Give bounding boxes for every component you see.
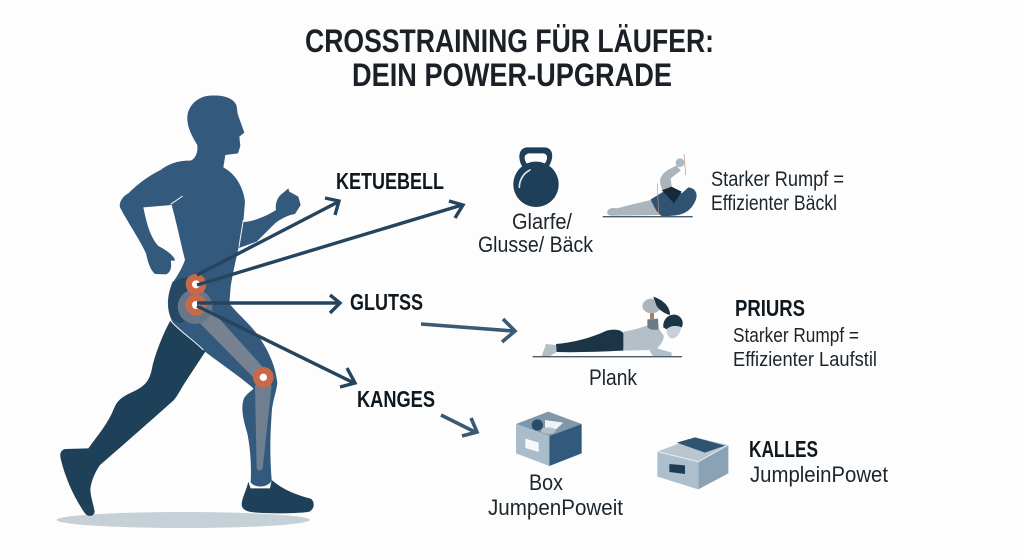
title: DEIN POWER-UPGRADE: [352, 57, 672, 93]
highlight lines on body: [170, 196, 243, 350]
body and front leg: [120, 95, 301, 487]
arrow: hip to Glutss: [197, 295, 340, 313]
block: Priurs: PRIURS: [735, 295, 805, 321]
runner figure: [57, 95, 314, 528]
icon: sit-up figure: [603, 154, 697, 217]
title: CROSSTRAINING FÜR LÄUFER:: [305, 23, 714, 59]
arrow: hip to Ketuebell: [197, 198, 339, 275]
text: Starker Rumpf, Effizienter Bäckl: Starker Rumpf =: [711, 168, 844, 191]
joint: knee: [253, 367, 274, 388]
text: Plank: Plank: [589, 365, 638, 390]
text: Box JumpenPoweit: [488, 470, 623, 520]
ground shadow: [57, 512, 310, 528]
hip halo: [178, 289, 212, 324]
icon: open box: [516, 412, 582, 466]
title: [305, 23, 714, 93]
block: Priurs: Effizienter Laufstil: [733, 348, 877, 371]
block: Kalles: JumpleinPowet: [750, 462, 888, 487]
label: Ketuebell: KETUEBELL: [336, 168, 444, 194]
icon: plank figure: [533, 297, 683, 357]
arrow: Glutss to plank: [421, 319, 515, 342]
icon: kettlebell: [513, 147, 559, 207]
text: Glarfe / Glusse / Bäck: Glarfe/: [512, 209, 573, 234]
glute shading: [168, 277, 190, 323]
label: Kanges: KANGES: [357, 386, 435, 412]
arrow: Kanges to box: [441, 415, 477, 436]
arrow: hip to Kanges: [197, 306, 355, 387]
thigh and shin bones: [197, 307, 272, 470]
label: Glutss: GLUTSS: [350, 289, 423, 315]
text: Box JumpenPoweit: Box: [529, 470, 563, 495]
block: Priurs: Starker Rumpf =: [733, 324, 859, 347]
block: Priurs: [733, 295, 877, 371]
front shoe: [242, 480, 314, 513]
text: Starker Rumpf, Effizienter Bäckl: [711, 168, 844, 215]
icon: closed box: [657, 437, 728, 489]
arrow: hip to kettlebell icon: [197, 201, 463, 285]
block: Kalles: [749, 436, 888, 487]
text: Starker Rumpf, Effizienter Bäckl: Effizienter Bäckl: [711, 192, 837, 215]
text: Box JumpenPoweit: JumpenPoweit: [488, 495, 623, 520]
block: Kalles: KALLES: [749, 436, 818, 462]
text: Glarfe / Glusse / Bäck: Glusse/ Bäck: [478, 232, 594, 257]
joint: upper hip: [186, 274, 206, 295]
back leg and shoe: [60, 320, 205, 516]
text: Glarfe / Glusse / Bäck: [478, 209, 594, 257]
joint: lower hip: [185, 294, 207, 316]
